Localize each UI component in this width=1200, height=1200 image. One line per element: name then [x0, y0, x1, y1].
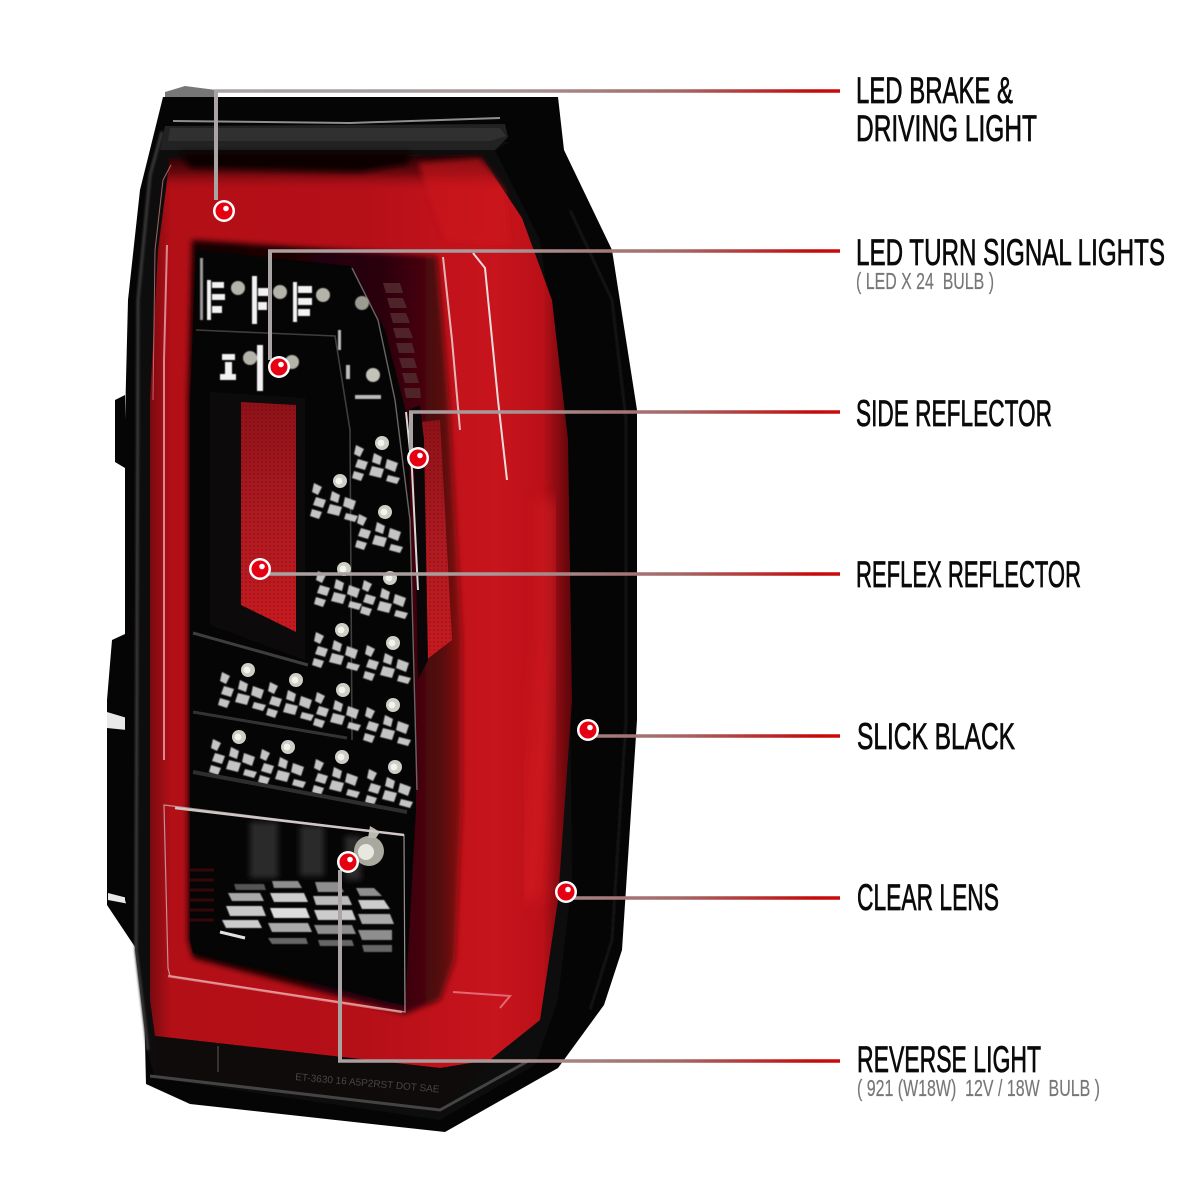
- top shadow on bar: [180, 152, 410, 172]
- leader: clear lens: [555, 881, 840, 903]
- leader: reverse light: [337, 851, 840, 1061]
- marker dot: [337, 851, 359, 873]
- tail light housing: [107, 86, 637, 1132]
- bulb: [354, 836, 384, 866]
- upper crease right section: [418, 158, 510, 244]
- top gasket strip: [160, 124, 508, 150]
- inner dark halo: [188, 240, 462, 1014]
- reverse light section: [190, 812, 405, 1002]
- marker dot: [249, 558, 271, 580]
- leader: side reflector: [407, 412, 840, 469]
- panel: reflex reflector: [210, 392, 305, 660]
- LED clusters lower rows: [193, 663, 413, 812]
- label: LED brake and driving light: [856, 70, 1037, 149]
- leader: reflex reflector: [249, 558, 840, 580]
- red light bar: [150, 155, 572, 1068]
- tail light housing: ET-3630 16 A5P2RST DOT SAE: [295, 1072, 440, 1096]
- label: LED brake and driving light: DRIVING LIGHT: [856, 108, 1037, 149]
- LED clusters top: [200, 258, 381, 399]
- marker dot: [577, 719, 599, 741]
- LED clusters mid: [310, 436, 411, 746]
- marker dot: [268, 356, 290, 378]
- soft vertical reflections: [250, 822, 361, 880]
- label: LED turn signal lights: ( LED X 24 BULB ): [856, 268, 994, 294]
- clear lens grey border: [135, 130, 572, 1120]
- label: LED brake and driving light: LED BRAKE &: [856, 70, 1013, 111]
- right side gloss edge: [570, 210, 626, 1010]
- label: slick black: SLICK BLACK: [857, 716, 1015, 757]
- leader: LED brake and driving light: [213, 91, 840, 222]
- mounting tabs: [107, 395, 150, 950]
- label: LED turn signal lights: [856, 232, 1165, 294]
- marker dot: [407, 447, 429, 469]
- label: reverse light: REVERSE LIGHT: [857, 1039, 1041, 1080]
- label: reverse light: ( 921 (W18W) 12V / 18W BULB ): [857, 1075, 1100, 1101]
- marker dot: [555, 881, 577, 903]
- label: side reflector: SIDE REFLECTOR: [856, 393, 1052, 434]
- label: clear lens: CLEAR LENS: [857, 877, 999, 918]
- bar bright highlights: [153, 165, 171, 400]
- side ribs: [383, 283, 421, 398]
- panel: side reflector: [420, 420, 452, 660]
- clear plate outline: [164, 805, 405, 1012]
- bottom dark strip and embossed text: [155, 1036, 490, 1112]
- leader: LED turn signal lights: [268, 251, 840, 378]
- outer black body: [125, 97, 637, 1132]
- inner black panel: [190, 250, 416, 1006]
- marker dot: [213, 200, 235, 222]
- leader: slick black: [577, 719, 840, 741]
- reverse reflector ribs: [222, 881, 394, 952]
- label: reverse light: [857, 1039, 1100, 1101]
